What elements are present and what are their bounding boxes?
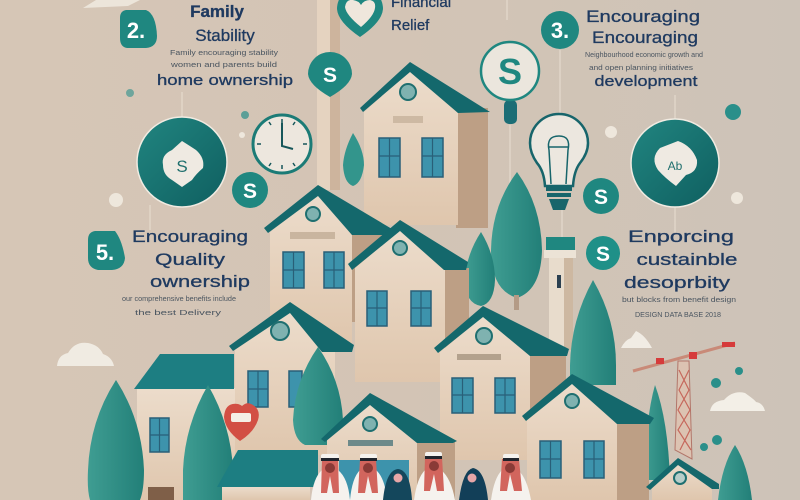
panel: encouraging development: [541, 7, 703, 90]
people group: [311, 452, 531, 500]
tree: small middle: [465, 232, 495, 306]
small dollar coin right: [583, 178, 619, 214]
small dollar coin right: S: [594, 186, 608, 209]
heart pin icon: [337, 0, 383, 37]
panel: family stability: women and parents build: [170, 60, 277, 69]
person 6: [491, 454, 531, 500]
small description: Family encouraging stability: [170, 48, 278, 57]
coin 6: [586, 236, 620, 270]
crane droplets: [700, 367, 743, 451]
cloud top right small: [621, 331, 652, 348]
panel: encouraging quality ownership: [88, 227, 250, 317]
panel: encouraging quality ownership: the best Delivery: [135, 308, 221, 317]
large circle: right emblem: [631, 119, 719, 207]
tree: right of house row: [645, 385, 670, 480]
small description: but blocks from benefit design: [622, 295, 736, 304]
person 3: [383, 469, 412, 500]
cloud right: [710, 392, 765, 411]
panel: financial relief: Relief: [391, 17, 430, 34]
house: upper left: [264, 185, 392, 345]
house: left flat-roof: [134, 354, 235, 500]
clock icon: [253, 115, 311, 173]
house: bottom tiled roof: [217, 450, 318, 500]
leaf beside column: [343, 133, 364, 186]
magnifier dollar icon: [481, 42, 539, 124]
coin 6: S: [596, 243, 610, 266]
number badge 3: [541, 11, 579, 49]
number badge 3: 3.: [551, 18, 569, 43]
house: top centre: [360, 62, 490, 228]
panel: enforcing sustainable prosperity: custainble: [636, 250, 738, 269]
panel: family stability: [120, 2, 293, 89]
large circle: left emblem: [137, 117, 227, 207]
number badge 2: [120, 10, 157, 48]
person 4: [414, 452, 455, 500]
pin dollar icon: S: [323, 64, 337, 87]
chimney column: [317, 0, 340, 190]
house: mid right: [434, 306, 569, 460]
cloud top left: [83, 0, 140, 8]
thin hanging lines: [150, 0, 675, 238]
small description: our comprehensive benefits include: [122, 294, 236, 303]
panel: encouraging development: and open planning initiatives: [589, 63, 693, 72]
tree: far left: [88, 380, 144, 500]
heading: family stability: Family: [190, 2, 244, 21]
cloud left: [57, 343, 114, 366]
tree: right of top house: [491, 172, 542, 298]
person 1: [311, 454, 350, 500]
tree: right mid: [570, 280, 616, 385]
lightbulb icon: [530, 114, 588, 210]
panel: enforcing sustainable prosperity: [586, 227, 738, 319]
panel: family stability: Stability: [195, 26, 255, 45]
small dollar coin: [232, 172, 268, 208]
person 2: [350, 454, 387, 500]
crane: [633, 342, 735, 459]
lighthouse tower: [544, 237, 576, 350]
person 5: [459, 468, 488, 500]
tree: left bottom: [183, 385, 233, 500]
magnifier dollar icon: S: [498, 51, 522, 92]
large circle: left emblem: S: [176, 157, 188, 176]
house: bottom centre: [321, 393, 457, 500]
large circle: right emblem: Ab: [668, 159, 683, 173]
heading: encouraging quality ownership: Encouraging: [132, 227, 248, 246]
heading: Enporcing: [628, 227, 734, 246]
number badge 5: 5.: [96, 240, 114, 265]
tree trunk: [514, 295, 519, 310]
number badge 5: [88, 231, 125, 270]
heading: encouraging: Encouraging: [586, 7, 700, 26]
small dollar coin: S: [243, 180, 257, 203]
panel: encouraging development: Encouraging: [592, 28, 698, 47]
number badge 2: 2.: [127, 18, 145, 43]
heart balloon: [224, 403, 259, 441]
small description: Neighbourhood economic growth and: [585, 50, 703, 59]
house: far right small: [646, 458, 719, 500]
panel: financial relief: [337, 0, 451, 37]
panel: encouraging quality ownership: ownership: [150, 272, 250, 291]
panel: enforcing sustainable prosperity: DESIGN DATA BASE 2018: [635, 310, 721, 319]
panel: encouraging quality ownership: Quality: [155, 250, 226, 269]
small decorative droplets: [109, 89, 743, 211]
subheading: home ownership: home ownership: [157, 72, 293, 89]
house: mid left: [229, 302, 354, 455]
tree: far right: [718, 445, 752, 500]
house: lower right: [522, 374, 654, 500]
pin dollar icon: [308, 52, 352, 97]
house: centre: [348, 220, 469, 382]
tree: centre left: [293, 347, 343, 445]
panel: enforcing sustainable prosperity: desoprbity: [624, 273, 731, 292]
subheading: development: development: [594, 73, 698, 90]
